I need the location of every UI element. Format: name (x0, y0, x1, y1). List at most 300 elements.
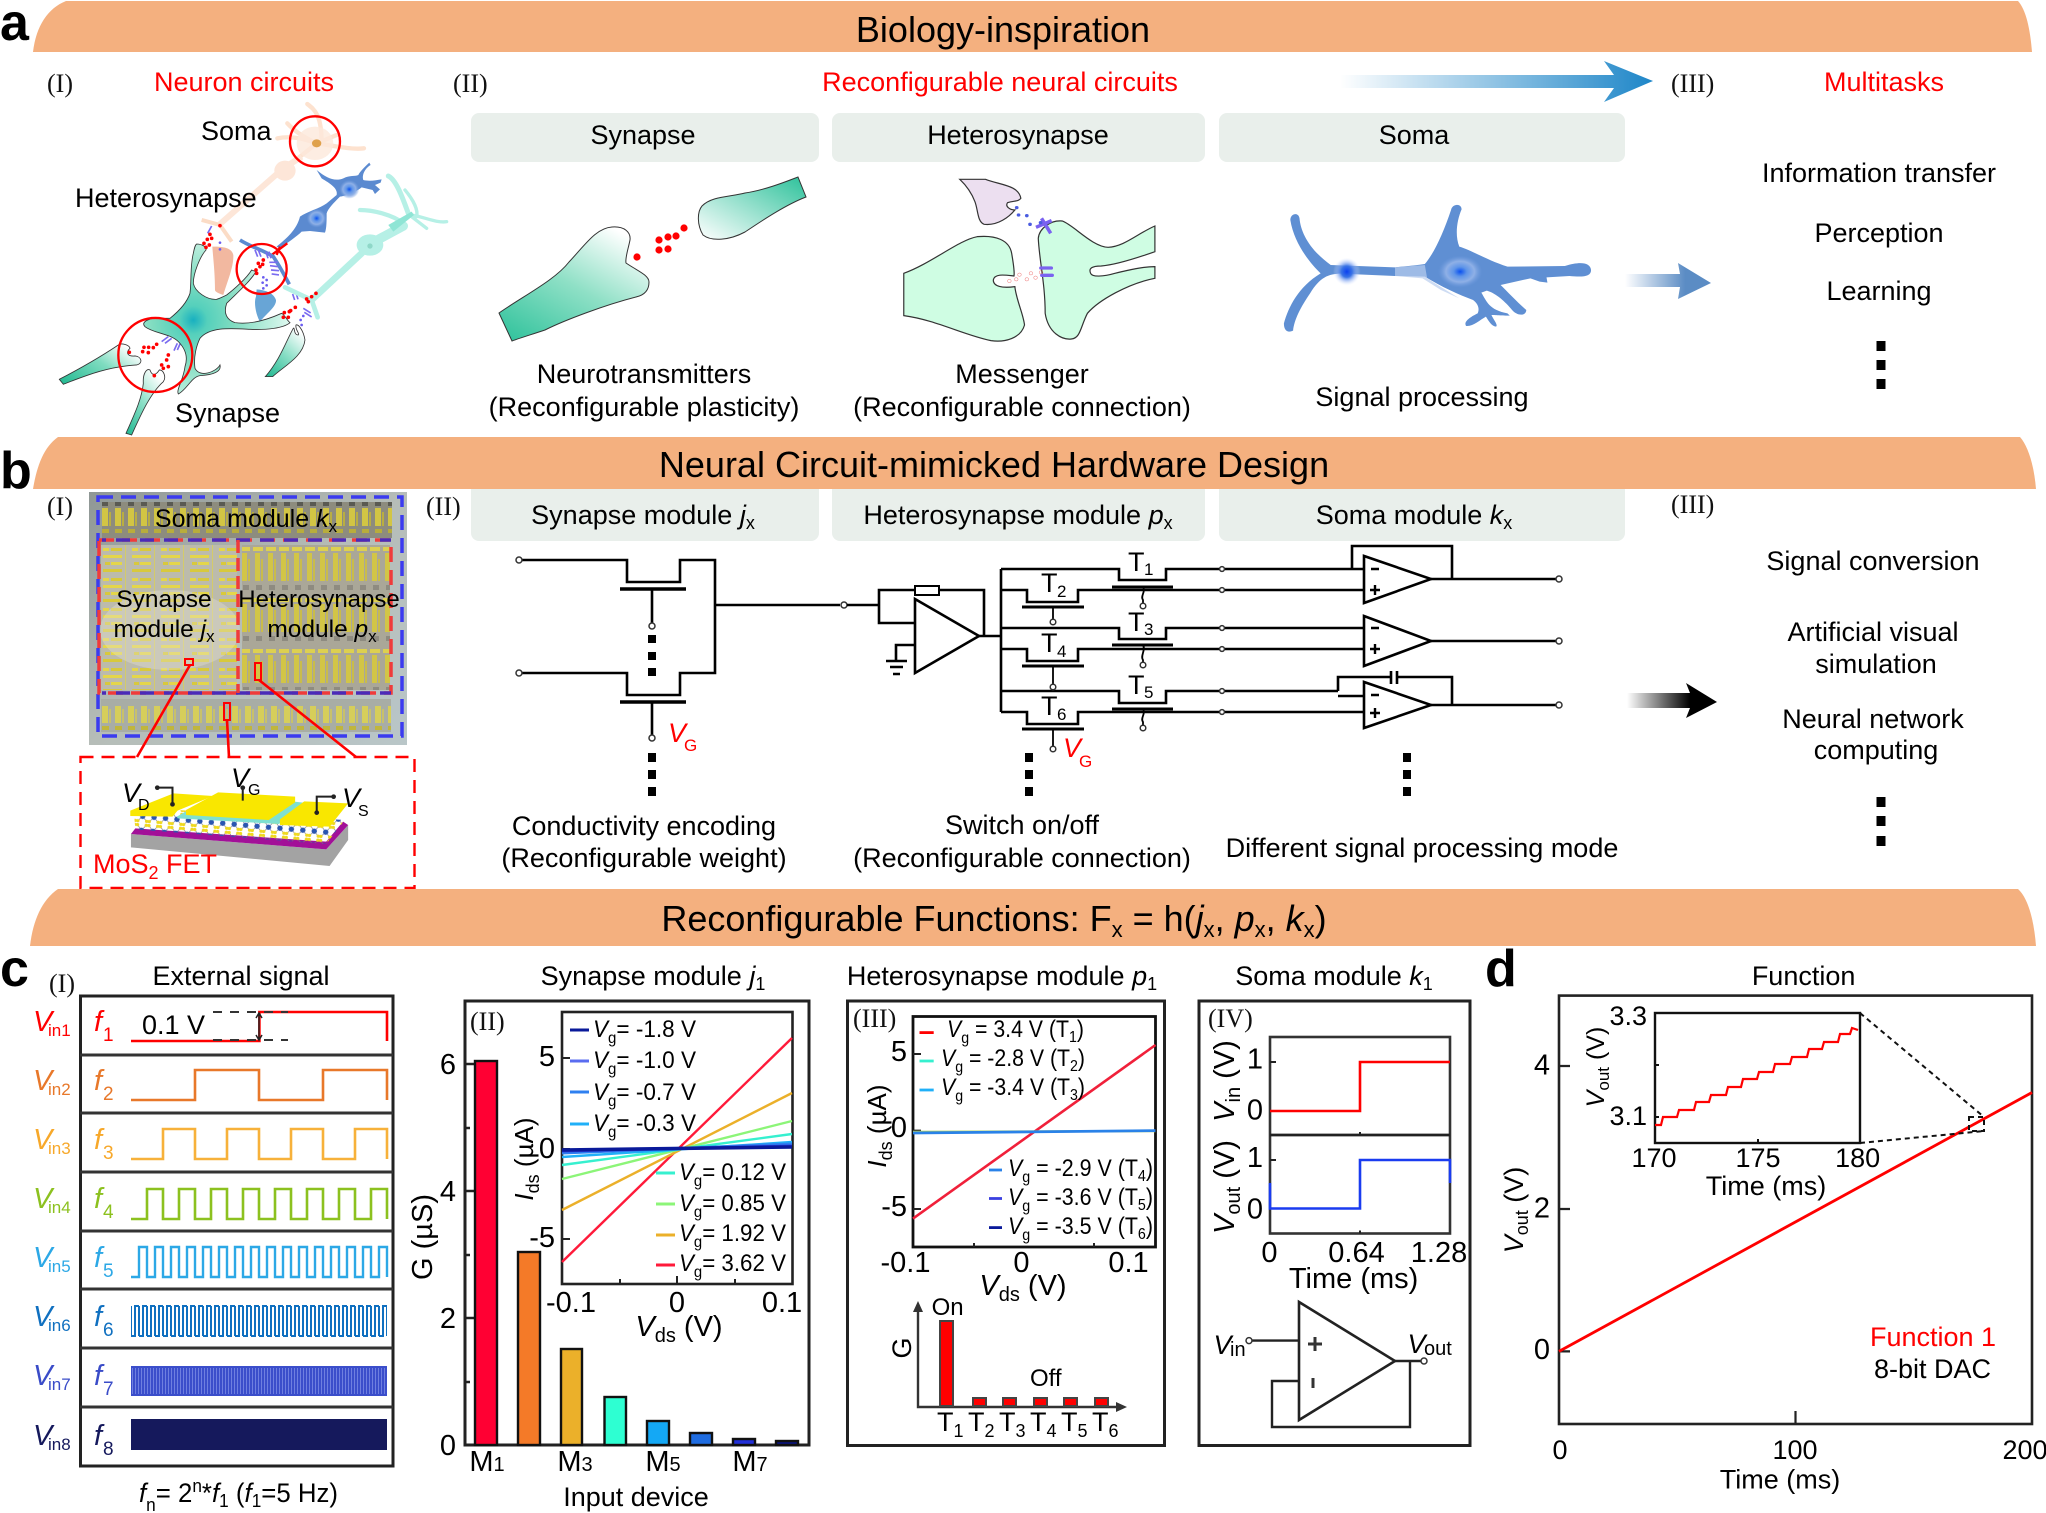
marker I: (I) (49, 969, 75, 998)
panel IV soma chart: (V) (1209, 1140, 1241, 1187)
heterosynapse circuit: T (1128, 547, 1144, 577)
marker II: (II) (453, 69, 488, 98)
chart inset: Ids vs Vds: V (679, 1220, 696, 1247)
text neurotransmitters: Neurotransmitters (537, 359, 751, 389)
panel IV soma chart: 0 (1247, 1194, 1263, 1226)
panel III heterosynapse chart: V (1008, 1155, 1024, 1182)
title reconfigurable neural circuits: Reconfigurable neural circuits (822, 67, 1178, 97)
banner c: reconfigurable functions: , (1266, 898, 1286, 939)
chart inset: Ids vs Vds: I (509, 1193, 539, 1201)
panel III heterosynapse chart: ) (1078, 1074, 1085, 1101)
text conductivity encoding: (Reconfigurable weight) (501, 843, 787, 873)
on/off bar chart: 1 (954, 1421, 964, 1441)
label soma: Soma (201, 116, 273, 146)
text conductivity encoding (501, 811, 787, 873)
panel IV soma chart: 1 (1247, 1044, 1263, 1076)
row f6: 6 (103, 1320, 114, 1341)
panel III heterosynapse chart: 1 (1069, 1029, 1077, 1046)
panel IV soma chart: Time (ms) (1289, 1263, 1418, 1295)
chart inset: Ids vs Vds: g (608, 1124, 616, 1141)
header soma module (1219, 489, 1625, 541)
chart inset: Ids vs Vds (509, 1012, 802, 1347)
panel III heterosynapse chart: 3 (1070, 1087, 1078, 1104)
panel III heterosynapse chart: ) (1146, 1213, 1153, 1240)
on/off bar chart: T (968, 1407, 984, 1437)
chart inset: Ids vs Vds: g (608, 1061, 616, 1078)
chart inset: Ids vs Vds: = 0.85 V (702, 1190, 786, 1217)
chart: synapse conductance bars: 6 (440, 1049, 456, 1081)
title heterosynapse module p1: 1 (1147, 974, 1157, 994)
chart: Vout vs time: 100 (1772, 1435, 1818, 1465)
row f3: 3 (103, 1143, 114, 1164)
synapse circuit (516, 557, 840, 796)
chart: synapse conductance bars: M7 (732, 1446, 768, 1478)
soma illustration (1284, 205, 1591, 332)
inset staircase chart: 180 (1835, 1143, 1880, 1173)
chip micrograph: Heterosynapse (238, 586, 400, 613)
title soma module k1: Soma module k (1235, 961, 1423, 991)
panel III heterosynapse chart: = 3.4 V (T (969, 1016, 1069, 1043)
op amp follower: in (1230, 1339, 1246, 1361)
MoS2 FET inset: S (358, 803, 369, 820)
on/off bar chart: T (999, 1407, 1016, 1437)
panel III heterosynapse chart: 0 (1013, 1247, 1030, 1279)
heterosynapse circuit: 2 (1057, 582, 1066, 601)
chart inset: Ids vs Vds: -0.1 (546, 1287, 596, 1319)
chart: synapse conductance bars: M1 (469, 1446, 505, 1478)
row f5: in5 (48, 1257, 71, 1276)
panel III heterosynapse chart: V (1008, 1184, 1024, 1211)
panel IV soma chart: in (1223, 1087, 1245, 1102)
chart inset: Ids vs Vds: (V) (676, 1311, 723, 1343)
chip micrograph: x (329, 517, 338, 536)
header heterosynapse module: x (1164, 513, 1173, 533)
text switch on off: Switch on/off (945, 810, 1100, 840)
legend function 1 (1870, 1322, 1996, 1384)
text neurotransmitters (489, 359, 799, 422)
on/off bar chart: 3 (1016, 1421, 1026, 1441)
chart inset: Ids vs Vds: V (593, 1079, 610, 1106)
chip micrograph: x (206, 627, 215, 646)
row f7: in7 (48, 1375, 71, 1394)
op amp follower: out (1424, 1338, 1452, 1360)
header synapse module: x (746, 513, 755, 533)
synapse illustration (499, 177, 806, 341)
banner c: reconfigurable functions: , (1215, 898, 1235, 939)
text different mode: Different signal processing mode (1226, 833, 1618, 863)
chart inset: Ids vs Vds: = -1.0 V (616, 1047, 696, 1074)
inset staircase chart: 3.1 (1609, 1101, 1647, 1131)
row f5 (33, 1242, 387, 1282)
formula: 1 (219, 1491, 229, 1511)
chart inset: Ids vs Vds: 0.1 (762, 1287, 802, 1319)
chip micrograph: Synapse (116, 586, 212, 613)
on/off bar chart: T (1092, 1407, 1108, 1437)
on/off bar chart: 5 (1078, 1421, 1088, 1441)
banner c: reconfigurable functions: x (1112, 917, 1123, 942)
inset staircase chart: out (1594, 1067, 1613, 1091)
hardware task list (1766, 546, 1980, 846)
header synapse module (471, 489, 819, 541)
label synapse: Synapse (175, 398, 280, 428)
title neuron circuits: Neuron circuits (154, 67, 334, 97)
panel d (1485, 940, 2046, 1495)
row f3 (33, 1124, 387, 1164)
header heterosynapse module (832, 489, 1205, 541)
panel III heterosynapse chart: 0 (891, 1112, 907, 1144)
panel IV soma chart: 0.64 (1328, 1237, 1385, 1269)
inset staircase chart: (V) (1582, 1027, 1610, 1067)
heading a: Biology-inspiration (856, 9, 1150, 50)
chart inset: Ids vs Vds: ds (655, 1325, 676, 1347)
row f3: f (94, 1124, 105, 1156)
row f4: 4 (103, 1202, 114, 1223)
chart: Vout vs time: 4 (1534, 1050, 1550, 1082)
row f8: in8 (48, 1435, 71, 1454)
row f5: 5 (103, 1261, 114, 1282)
header soma module: Soma module k (1316, 500, 1503, 530)
external signal table (33, 996, 393, 1466)
title synapse module j1: 1 (755, 974, 765, 994)
panel IV soma chart: out (1223, 1186, 1245, 1215)
label heterosynapse: Heterosynapse (75, 183, 257, 213)
chart: synapse conductance bars: M3 (557, 1446, 593, 1478)
row f1 (33, 1006, 387, 1046)
chart inset: Ids vs Vds: g (608, 1030, 616, 1047)
on/off bar chart (887, 1294, 1127, 1441)
label d: d (1485, 940, 1517, 998)
heterosynapse circuit: 1 (1144, 560, 1153, 579)
row f1: in1 (48, 1021, 71, 1040)
panel IV soma chart: 0 (1261, 1237, 1278, 1269)
chart: Vout vs time: (V) (1499, 1167, 1529, 1210)
chart: Vout vs time: 0 (1534, 1334, 1550, 1366)
panel IV soma chart: 1 (1247, 1142, 1263, 1174)
inset staircase chart: V (1582, 1088, 1610, 1107)
panel III heterosynapse chart: g (1022, 1227, 1030, 1244)
chart inset: Ids vs Vds: = -0.7 V (616, 1079, 696, 1106)
on/off bar chart: On (932, 1294, 964, 1321)
panel III heterosynapse chart: ) (1078, 1045, 1085, 1072)
MoS2 FET inset: D (138, 797, 150, 814)
heterosynapse circuit: T (1128, 607, 1144, 637)
chart inset: Ids vs Vds: (µA) (509, 1117, 539, 1174)
column header soma: Soma (1379, 120, 1450, 150)
MoS2 FET inset: V (342, 783, 363, 813)
chart: synapse conductance bars: G (µS) (407, 1194, 439, 1280)
panel IV soma chart (1199, 1001, 1470, 1446)
chart: Vout vs time: out (1512, 1210, 1532, 1235)
panel IV soma chart: V (1209, 1212, 1241, 1234)
banner c: reconfigurable functions: x (1204, 917, 1215, 942)
panel III heterosynapse chart: g (961, 1030, 969, 1047)
panel III heterosynapse chart: = -3.4 V (T (963, 1074, 1070, 1101)
chip micrograph: x (368, 627, 377, 646)
panel III heterosynapse chart: = -2.9 V (T (1030, 1155, 1138, 1182)
panel III heterosynapse chart: -5 (881, 1191, 907, 1223)
on/off bar chart: T (937, 1407, 954, 1437)
chart inset: Ids vs Vds: V (679, 1190, 696, 1217)
row f2: f (94, 1065, 105, 1097)
arrow black (1627, 683, 1717, 718)
row f1: 0.1 V (142, 1010, 205, 1040)
soma circuit (1338, 546, 1562, 796)
hardware task list: Neural network (1782, 704, 1964, 734)
chart inset: Ids vs Vds: = -1.8 V (616, 1016, 696, 1043)
arrow blue (1340, 61, 1653, 102)
panel III heterosynapse chart: ds (876, 1141, 896, 1160)
banner c: reconfigurable functions: = h( (1123, 898, 1196, 939)
marker I: (I) (47, 492, 73, 521)
heterosynapse circuit: 4 (1057, 642, 1066, 661)
panel b: hardware design (0, 437, 2036, 888)
op amp follower (1214, 1302, 1452, 1427)
banner c: reconfigurable functions: p (1234, 898, 1255, 939)
formula: f (139, 1478, 149, 1508)
op amp follower: V (1408, 1329, 1428, 1359)
row f7: f (94, 1360, 105, 1392)
chart inset: Ids vs Vds: 5 (539, 1041, 555, 1073)
chart inset: Ids vs Vds: g (694, 1173, 702, 1190)
synapse circuit: G (684, 736, 697, 755)
formula: = 2 (156, 1478, 192, 1508)
chart inset: Ids vs Vds: 0 (539, 1133, 555, 1165)
column header heterosynapse (832, 113, 1205, 162)
panel III heterosynapse chart: 5 (891, 1036, 907, 1068)
panel IV soma chart: V (1209, 1100, 1241, 1122)
title synapse module j1: Synapse module j (541, 961, 755, 991)
row f2 (33, 1065, 387, 1105)
hardware task list: Signal conversion (1766, 546, 1980, 576)
inset staircase chart: 3.3 (1609, 1001, 1647, 1031)
chart inset: Ids vs Vds: ds (523, 1174, 543, 1193)
synapse circuit: V (668, 718, 689, 748)
text messenger: Messenger (955, 359, 1089, 389)
row f5: f (94, 1242, 105, 1274)
hardware task list: Artificial visual (1787, 617, 1959, 647)
panel III heterosynapse chart: V (941, 1074, 957, 1101)
chip micrograph: module p (267, 616, 368, 643)
panel III heterosynapse chart: 5 (1138, 1197, 1146, 1214)
inset staircase chart: 175 (1735, 1143, 1781, 1173)
op amp follower: V (1214, 1330, 1234, 1360)
panel III heterosynapse chart: V (979, 1270, 1001, 1302)
MoS2 FET inset: FET (159, 849, 217, 879)
heterosynapse illustration (904, 179, 1155, 341)
MoS2 FET inset: V (122, 778, 143, 808)
heterosynapse circuit: T (1041, 691, 1058, 721)
text switch on off (853, 810, 1191, 873)
row f8 (33, 1419, 387, 1460)
chart: synapse conductance bars: M5 (645, 1446, 681, 1478)
column header soma (1219, 113, 1625, 162)
chart inset: Ids vs Vds: V (679, 1159, 696, 1186)
row f2: V (33, 1065, 55, 1097)
marker II: (II) (426, 492, 461, 521)
row f4 (33, 1183, 387, 1223)
chart: synapse conductance bars: 4 (440, 1176, 456, 1208)
panel III heterosynapse chart: g (955, 1088, 963, 1105)
on/off bar chart: 6 (1108, 1421, 1119, 1441)
header synapse module: Synapse module j (531, 500, 746, 530)
chart inset: Ids vs Vds: V (593, 1047, 610, 1074)
heterosynapse circuit (841, 547, 1364, 796)
chart: synapse conductance bars: (II) (470, 1007, 505, 1036)
multitask list: Information transfer (1762, 158, 1996, 188)
text neurotransmitters: (Reconfigurable plasticity) (489, 392, 799, 422)
row f3: V (33, 1124, 55, 1156)
row f1: f (94, 1006, 105, 1038)
chart inset: Ids vs Vds: = 1.92 V (702, 1220, 786, 1247)
text switch on off: (Reconfigurable connection) (853, 843, 1191, 873)
panel III heterosynapse chart: ) (1146, 1155, 1153, 1182)
heterosynapse circuit: 3 (1144, 620, 1153, 639)
row f1: V (33, 1006, 55, 1038)
row f4: f (94, 1183, 105, 1215)
row f4: in4 (48, 1198, 71, 1217)
row f8: V (33, 1420, 55, 1452)
formula: * (202, 1478, 212, 1508)
row f6: V (33, 1301, 55, 1333)
on/off bar chart: 4 (1046, 1421, 1057, 1441)
banner c: reconfigurable functions: j (1191, 898, 1205, 939)
row f3: in3 (48, 1139, 71, 1158)
chart inset: Ids vs Vds: = -0.3 V (616, 1110, 696, 1137)
title external signal: External signal (152, 961, 330, 991)
MoS2 FET inset: MoS (93, 849, 149, 879)
chart: Vout vs time (1499, 996, 2046, 1495)
chart inset: Ids vs Vds: = 0.12 V (702, 1159, 786, 1186)
inset staircase chart (1582, 1001, 1880, 1201)
panel III heterosynapse chart: I (862, 1160, 892, 1168)
marker III: (III) (1671, 69, 1714, 98)
chart inset: Ids vs Vds: V (635, 1311, 657, 1343)
panel III heterosynapse chart: 6 (1138, 1226, 1146, 1243)
chart: synapse conductance bars: 2 (440, 1303, 456, 1335)
marker I: (I) (47, 69, 73, 98)
text signal processing: Signal processing (1315, 382, 1529, 412)
heterosynapse circuit: 6 (1057, 705, 1066, 724)
panel III heterosynapse chart: (III) (853, 1004, 896, 1033)
chart: Vout vs time: Time (ms) (1720, 1465, 1840, 1495)
chart: Vout vs time: 2 (1534, 1192, 1550, 1224)
on/off bar chart: T (1061, 1407, 1078, 1437)
row f2: 2 (103, 1084, 114, 1105)
chart: synapse conductance bars (407, 1001, 809, 1512)
chart inset: Ids vs Vds: g (608, 1093, 616, 1110)
panel III heterosynapse chart: ) (1077, 1016, 1084, 1043)
panel IV soma chart: (V) (1209, 1040, 1241, 1087)
row f5: V (33, 1242, 55, 1274)
banner c: reconfigurable functions: ) (1315, 898, 1327, 939)
panel IV soma chart: 1.28 (1411, 1237, 1467, 1269)
MoS2 FET inset (80, 757, 414, 888)
zoom indicator (1860, 1013, 1984, 1143)
chart: Vout vs time: V (1499, 1232, 1529, 1253)
row f6 (33, 1301, 387, 1341)
panel III heterosynapse chart: g (955, 1059, 963, 1076)
panel III heterosynapse chart: V (941, 1045, 957, 1072)
banner c: reconfigurable functions: x (1304, 917, 1315, 942)
heterosynapse circuit: T (1041, 568, 1058, 598)
chart inset: Ids vs Vds: V (679, 1250, 696, 1277)
row f7: V (33, 1360, 55, 1392)
chart inset: Ids vs Vds: 0 (669, 1287, 685, 1319)
banner b (33, 437, 2036, 489)
banner c: reconfigurable functions (30, 889, 2036, 946)
panel III heterosynapse chart: (µA) (862, 1084, 892, 1141)
row f8: f (94, 1420, 105, 1452)
banner c: reconfigurable functions: k (1286, 898, 1306, 939)
panel III heterosynapse chart: ds (999, 1284, 1020, 1306)
heterosynapse circuit: T (1041, 628, 1058, 658)
MoS2 FET inset: G (248, 782, 260, 799)
chart inset: Ids vs Vds: g (694, 1234, 702, 1251)
panel III heterosynapse chart (848, 1001, 1164, 1446)
chart: synapse conductance bars: Input device (563, 1482, 709, 1512)
legend function 1: 8-bit DAC (1874, 1354, 1991, 1384)
chip micrograph: Soma module k (155, 505, 329, 533)
chart inset: Ids vs Vds: V (593, 1110, 610, 1137)
multitask list (1762, 158, 1996, 389)
chip micrograph: module j (113, 616, 206, 643)
header heterosynapse module: Heterosynapse module p (863, 500, 1164, 530)
panel III heterosynapse chart: = -2.8 V (T (963, 1045, 1070, 1072)
formula: ( (229, 1478, 245, 1508)
formula: =5 Hz) (261, 1478, 338, 1508)
panel c (0, 940, 1470, 1513)
on/off bar chart: G (887, 1337, 917, 1359)
label c: c (0, 940, 29, 998)
row f6: in6 (48, 1316, 71, 1335)
panel III heterosynapse chart: 0.1 (1108, 1247, 1149, 1279)
multitask list: Perception (1814, 218, 1944, 248)
heterosynapse circuit: 5 (1144, 683, 1153, 702)
text conductivity encoding: Conductivity encoding (512, 811, 776, 841)
chart inset: Ids vs Vds: g (694, 1264, 702, 1281)
formula: 1 (252, 1491, 261, 1511)
neuron circuit illustration (59, 104, 447, 435)
title heterosynapse module p1: Heterosynapse module p (847, 961, 1147, 991)
row f7: 7 (103, 1379, 114, 1400)
title multitasks: Multitasks (1824, 67, 1944, 97)
formula: n (192, 1476, 202, 1496)
panel a: biology inspiration (0, 0, 2032, 435)
hardware task list: simulation (1815, 649, 1937, 679)
text messenger: (Reconfigurable connection) (853, 392, 1191, 422)
heterosynapse circuit: T (1128, 670, 1144, 700)
label b: b (0, 442, 32, 500)
MoS2 FET inset: 2 (149, 863, 159, 883)
hardware task list: computing (1814, 735, 1938, 765)
title function: Function (1752, 961, 1855, 991)
text messenger (853, 359, 1191, 422)
chip micrograph (89, 492, 407, 757)
row f4: V (33, 1183, 55, 1215)
panel III heterosynapse chart: (V) (1020, 1270, 1067, 1302)
panel III heterosynapse chart: = -3.5 V (T (1030, 1213, 1138, 1240)
panel III heterosynapse chart: g (1022, 1198, 1030, 1215)
header soma module: x (1503, 513, 1512, 533)
legend function 1: Function 1 (1870, 1322, 1996, 1352)
on/off bar chart: 2 (984, 1421, 995, 1441)
chart: Vout vs time: 0 (1552, 1435, 1568, 1465)
chart inset: Ids vs Vds: -5 (529, 1222, 555, 1254)
banner a (33, 1, 2032, 52)
chart inset: Ids vs Vds: = 3.62 V (702, 1250, 786, 1277)
row f1: 1 (103, 1025, 114, 1046)
arrow to multitasks (1625, 263, 1711, 299)
